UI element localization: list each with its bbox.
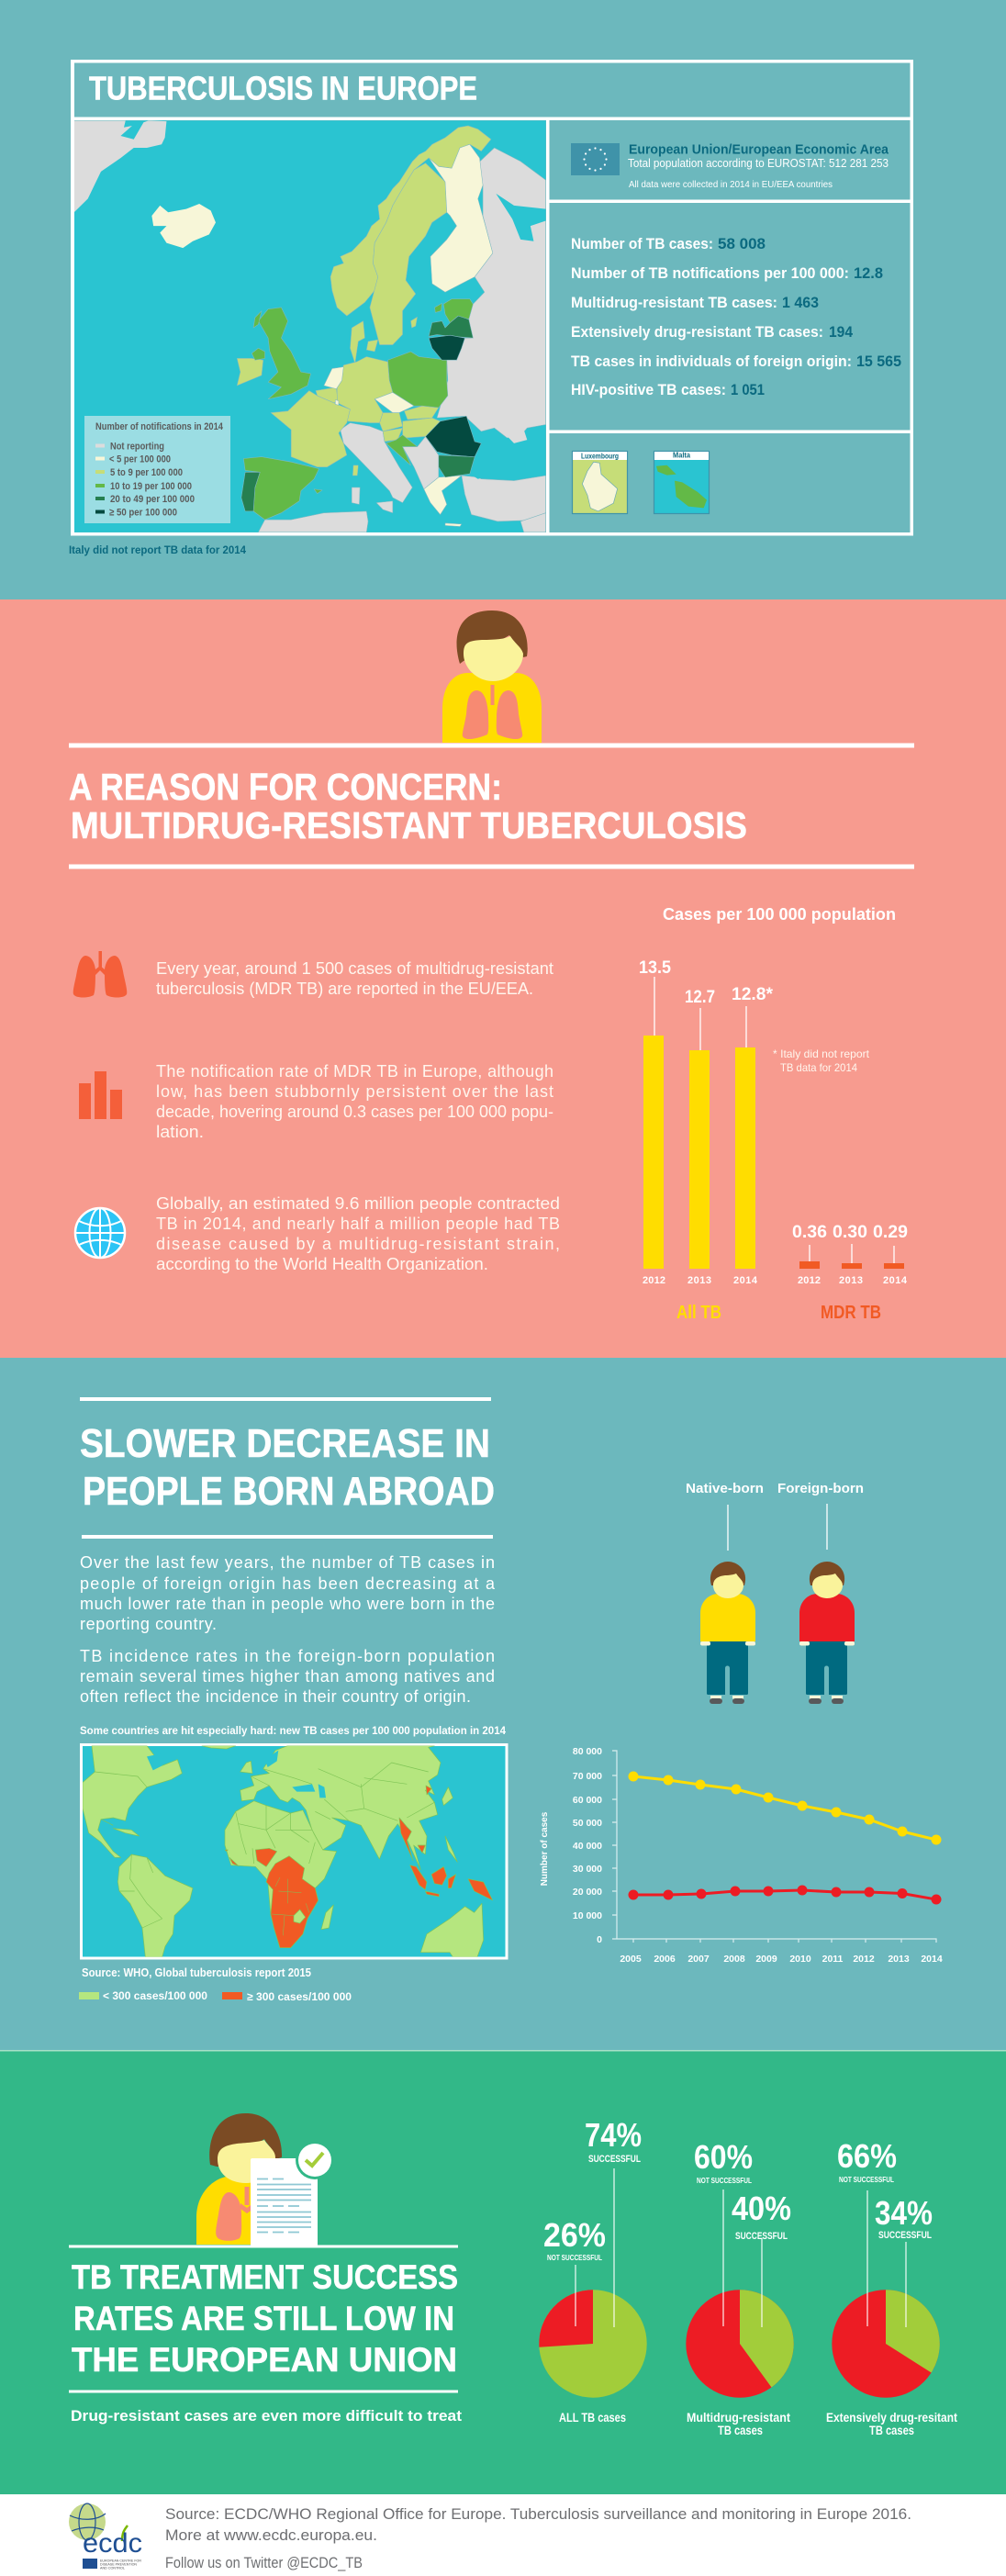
pie chart: all TB cases: NOT SUCCESSFUL xyxy=(547,2253,602,2262)
bar chart: cases per 100 000 population xyxy=(639,905,908,1323)
bar chart: cases per 100 000 population: 2012 xyxy=(643,1275,665,1286)
inset: Luxembourg: Luxembourg xyxy=(581,452,619,461)
bar chart: cases per 100 000 population: * Italy did not report xyxy=(773,1047,870,1060)
heading: THE EUROPEAN UNION xyxy=(72,2341,457,2379)
text: notification rate: The notification rate of MDR TB in Europe, although xyxy=(156,1062,553,1081)
text: MDR cases: tuberculosis (MDR TB) are reported in the EU/EEA. xyxy=(156,980,533,998)
twitter link: Follow us on Twitter @ECDC_TB xyxy=(165,2554,363,2571)
bar chart: cases per 100 000 population: 13.5 xyxy=(639,958,671,978)
source text: More at www.ecdc.europa.eu. xyxy=(165,2526,377,2544)
key statistics: 1 463 xyxy=(782,294,819,311)
EU flag xyxy=(571,143,620,175)
line chart: number of cases: 0 xyxy=(597,1934,602,1945)
pie chart: extensively drug-resistant TB cases: TB cases xyxy=(869,2423,914,2437)
key statistics: Number of TB cases: xyxy=(571,235,713,252)
bar chart: cases per 100 000 population: 12.8* xyxy=(732,985,774,1004)
line chart: number of cases: 70 000 xyxy=(573,1771,602,1782)
text: notification rate: low, has been stubbornly persistent over the last xyxy=(156,1082,553,1101)
key statistics xyxy=(571,235,901,398)
icon: lungs xyxy=(73,951,127,997)
pie chart: extensively drug-resistant TB cases: 66% xyxy=(837,2137,897,2175)
data note: All data were collected in 2014 in EU/EEA countries xyxy=(629,180,833,190)
icon: native-born person xyxy=(700,1562,755,1704)
pie chart: all TB cases xyxy=(539,2116,647,2425)
bar chart: cases per 100 000 population: 2014 xyxy=(883,1275,908,1286)
heading: A REASON FOR CONCERN: xyxy=(69,766,502,808)
bar chart: cases per 100 000 population: 0.36 xyxy=(792,1223,827,1242)
heading xyxy=(72,2258,458,2379)
pie chart: multidrug-resistant TB cases: TB cases xyxy=(718,2423,763,2437)
line chart: number of cases: 2007 xyxy=(687,1954,710,1965)
bar chart: cases per 100 000 population: All TB xyxy=(676,1303,721,1323)
bar chart: cases per 100 000 population: 2013 xyxy=(839,1275,863,1286)
icon: globe xyxy=(75,1208,125,1258)
bar chart: cases per 100 000 population: TB data for 2014 xyxy=(780,1061,857,1074)
icon: foreign-born person xyxy=(799,1562,855,1704)
text: foreign origin: Over the last few years, the number of TB cases in xyxy=(80,1553,495,1572)
pie chart: multidrug-resistant TB cases: SUCCESSFUL xyxy=(735,2231,788,2242)
inset: Malta xyxy=(654,450,709,514)
bar chart: cases per 100 000 population: 0.30 xyxy=(833,1223,867,1242)
line chart: number of cases: 10 000 xyxy=(573,1910,602,1921)
panel: slower decrease in people born abroad xyxy=(0,1358,1006,2050)
heading: SLOWER DECREASE IN xyxy=(80,1421,490,1466)
label: foreign-born: Foreign-born xyxy=(777,1481,864,1496)
map source: Source: WHO, Global tuberculosis report 2015 xyxy=(82,1966,311,1979)
text: incidence rates: often reflect the incidence in their country of origin. xyxy=(80,1687,471,1706)
rule xyxy=(69,744,914,747)
total population: Total population according to EUROSTAT: 512 281 253 xyxy=(628,157,889,170)
pie chart: extensively drug-resistant TB cases: SUCCESSFUL xyxy=(878,2230,932,2241)
line chart: number of cases: 2012 xyxy=(853,1954,875,1965)
text: incidence rates xyxy=(80,1647,495,1706)
pie chart: multidrug-resistant TB cases: 40% xyxy=(732,2190,791,2227)
ECDC logo xyxy=(69,2503,142,2570)
line chart: number of cases: 40 000 xyxy=(573,1841,602,1852)
line chart: number of cases: 2011 xyxy=(822,1954,844,1965)
text: foreign origin: much lower rate than in people who were born in the xyxy=(80,1595,495,1613)
source text xyxy=(165,2505,911,2544)
map legend xyxy=(79,1989,352,2003)
map legend: 10 to 19 per 100 000 xyxy=(110,481,192,492)
key statistics: TB cases in individuals of foreign origin: xyxy=(571,353,852,370)
pie chart: multidrug-resistant TB cases xyxy=(686,2138,794,2437)
text: notification rate xyxy=(156,1062,553,1141)
line chart: number of cases: 2010 xyxy=(789,1954,811,1965)
panel: treatment success rates xyxy=(0,2050,1006,2494)
line chart: number of cases: 2014 xyxy=(921,1954,943,1965)
panel: tuberculosis in Europe xyxy=(0,0,1006,599)
text: global estimate: disease caused by a multidrug-resistant strain, xyxy=(156,1235,560,1253)
pie chart: all TB cases: ALL TB cases xyxy=(559,2410,626,2425)
line chart: number of cases: 30 000 xyxy=(573,1864,602,1875)
text: incidence rates: remain several times higher than among natives and xyxy=(80,1667,495,1686)
footnote: Italy: Italy did not report TB data for 2014 xyxy=(69,545,247,556)
heading xyxy=(69,766,747,846)
title: TUBERCULOSIS IN EUROPE xyxy=(89,70,477,106)
text: global estimate: according to the World Health Organization. xyxy=(156,1255,488,1273)
pie chart: extensively drug-resistant TB cases xyxy=(826,2137,957,2437)
key statistics: 15 565 xyxy=(856,353,901,370)
line chart: number of cases: 50 000 xyxy=(573,1818,602,1829)
region heading: European Union/European Economic Area xyxy=(629,141,889,158)
ECDC logo: EUROPEAN CENTRE FOR xyxy=(100,2559,141,2563)
frame lines xyxy=(71,60,913,536)
map legend: ≥ 50 per 100 000 xyxy=(109,507,177,518)
icon: person holding document xyxy=(196,2113,334,2246)
pie chart: multidrug-resistant TB cases: NOT SUCCESSFUL xyxy=(697,2176,752,2185)
heading: PEOPLE BORN ABROAD xyxy=(83,1469,495,1514)
bar chart: cases per 100 000 population: MDR TB xyxy=(821,1303,881,1323)
map caption: Some countries are hit especially hard: new TB cases per 100 000 population in 2014 xyxy=(80,1724,506,1737)
line chart: number of cases: 2008 xyxy=(723,1954,745,1965)
heading: RATES ARE STILL LOW IN xyxy=(73,2300,454,2337)
footer xyxy=(0,2494,1006,2576)
heading xyxy=(80,1421,495,1514)
text: global estimate xyxy=(156,1194,560,1273)
icon: bar chart xyxy=(79,1071,122,1119)
label: native-born: Native-born xyxy=(686,1481,764,1496)
pie chart: extensively drug-resistant TB cases: NOT SUCCESSFUL xyxy=(839,2175,894,2184)
bar chart: cases per 100 000 population: 2014 xyxy=(733,1275,758,1286)
map of Europe xyxy=(74,120,546,532)
text: foreign origin: reporting country. xyxy=(80,1615,217,1633)
text: MDR cases xyxy=(156,959,553,998)
line chart: number of cases: 2009 xyxy=(755,1954,777,1965)
text: foreign origin: people of foreign origin has been decreasing at a xyxy=(80,1574,496,1593)
pie chart: all TB cases: 26% xyxy=(543,2216,606,2254)
key statistics: Number of TB notifications per 100 000: xyxy=(571,264,849,282)
text: global estimate: Globally, an estimated 9.6 million people contracted xyxy=(156,1194,560,1213)
key statistics: HIV-positive TB cases: xyxy=(571,381,726,398)
line chart: number of cases: 2013 xyxy=(888,1954,910,1965)
line chart: number of cases: 80 000 xyxy=(573,1746,602,1757)
chart title: Cases per 100 000 population xyxy=(663,905,896,924)
key statistics: 58 008 xyxy=(718,235,766,252)
ECDC logo: DISEASE PREVENTION xyxy=(100,2563,137,2567)
pie chart: extensively drug-resistant TB cases: Extensively drug-resitant xyxy=(826,2410,957,2425)
ECDC logo: AND CONTROL xyxy=(100,2567,125,2570)
pie chart: extensively drug-resistant TB cases: 34% xyxy=(875,2194,933,2232)
legend title: Number of notifications in 2014 xyxy=(95,421,224,432)
text: foreign origin xyxy=(80,1553,496,1633)
heading: MULTIDRUG-RESISTANT TUBERCULOSIS xyxy=(71,804,747,846)
inset: Malta: Malta xyxy=(673,450,690,459)
map legend: ≥ 300 cases/100 000 xyxy=(247,1990,352,2003)
map legend: Not reporting xyxy=(110,441,164,452)
bar chart: cases per 100 000 population: 0.29 xyxy=(873,1223,908,1242)
text: global estimate: TB in 2014, and nearly half a million people had TB xyxy=(156,1215,560,1233)
pie chart: all TB cases: SUCCESSFUL xyxy=(588,2154,641,2165)
text: incidence rates: TB incidence rates in the foreign-born population xyxy=(80,1647,495,1665)
bar chart: cases per 100 000 population: 2012 xyxy=(798,1275,821,1286)
bar chart: cases per 100 000 population: 2013 xyxy=(687,1275,711,1286)
icon: person with lungs xyxy=(442,610,542,743)
line chart: number of cases: 2005 xyxy=(620,1954,642,1965)
subheading: Drug-resistant cases are even more difficult to treat xyxy=(71,2408,463,2425)
key statistics: Multidrug-resistant TB cases: xyxy=(571,294,777,311)
map legend: 5 to 9 per 100 000 xyxy=(110,467,183,478)
line chart: number of cases: 60 000 xyxy=(573,1795,602,1806)
bar chart: cases per 100 000 population: 12.7 xyxy=(685,988,715,1007)
text: notification rate: lation. xyxy=(156,1123,204,1141)
map legend xyxy=(84,416,230,523)
text: notification rate: decade, hovering around 0.3 cases per 100 000 popu- xyxy=(156,1103,553,1121)
line chart: number of cases xyxy=(540,1746,943,1965)
line chart: number of cases: 20 000 xyxy=(573,1887,602,1898)
text: MDR cases: Every year, around 1 500 cases of multidrug-resistant xyxy=(156,959,553,978)
pie chart: multidrug-resistant TB cases: 60% xyxy=(694,2138,753,2176)
key statistics: 194 xyxy=(829,323,853,341)
line chart: number of cases: Number of cases xyxy=(540,1811,550,1886)
map legend: < 300 cases/100 000 xyxy=(103,1989,207,2002)
key statistics: 1 051 xyxy=(731,381,765,398)
source text: Source: ECDC/WHO Regional Office for Europe. Tuberculosis surveillance and monitoring in Europe 2016. xyxy=(165,2505,911,2523)
heading: TB TREATMENT SUCCESS xyxy=(72,2258,458,2296)
pie chart: multidrug-resistant TB cases: Multidrug-resistant xyxy=(687,2410,790,2425)
key statistics: 12.8 xyxy=(854,264,883,282)
pie chart: all TB cases: 74% xyxy=(585,2116,642,2154)
inset: Luxembourg xyxy=(573,452,628,514)
world map xyxy=(81,1744,507,1958)
key statistics: Extensively drug-resistant TB cases: xyxy=(571,323,823,341)
map legend: 20 to 49 per 100 000 xyxy=(110,494,195,505)
line chart: number of cases: 2006 xyxy=(654,1954,676,1965)
ECDC logo: ecdc xyxy=(83,2528,142,2559)
panel: multidrug-resistant tuberculosis xyxy=(0,599,1006,1358)
map legend: < 5 per 100 000 xyxy=(109,454,171,465)
